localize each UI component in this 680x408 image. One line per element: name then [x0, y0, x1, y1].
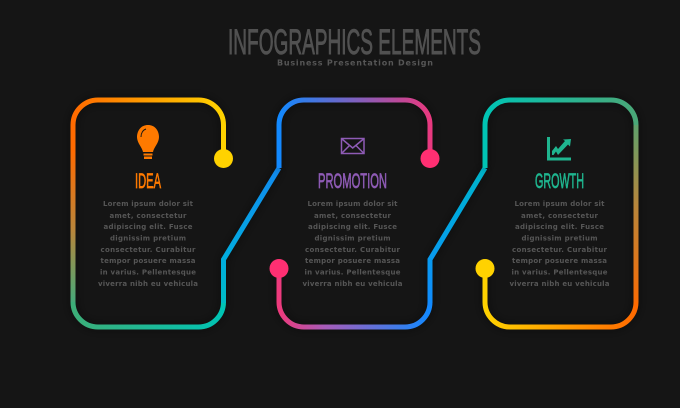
end dot [476, 259, 494, 278]
body text: growth: tempor posuere massa [512, 257, 607, 265]
heading: idea: IDEA [135, 170, 161, 193]
outline top [279, 100, 430, 168]
outline bottom [73, 302, 224, 327]
body text: growth: consectetur. Curabitur [512, 246, 608, 254]
body text: growth: in varius. Pellentesque [512, 268, 608, 276]
heading: growth: GROWTH [535, 170, 584, 193]
panel: growth [476, 100, 636, 327]
body text: growth: Lorem ipsum dolor sit [514, 200, 605, 208]
outline right [634, 125, 638, 302]
connector to growth [430, 168, 485, 303]
bottom dot [270, 259, 288, 278]
body text: promotion: adipiscing elit. Fusce [308, 223, 397, 231]
body text: idea: dignissim pretium [110, 234, 186, 242]
body text: promotion: viverra nibh eu vehicula [302, 280, 403, 288]
body text: idea: amet, consectetur [110, 212, 187, 220]
end dot [214, 149, 233, 168]
top dot [420, 149, 440, 168]
heading: promotion: PROMOTION [318, 170, 387, 193]
body text: promotion: amet, consectetur [314, 212, 392, 220]
body text: idea: tempor posuere massa [100, 257, 196, 265]
subtitle: Business Presentation Design [277, 58, 433, 68]
body text: growth: amet, consectetur [521, 212, 599, 220]
body text: growth [510, 200, 610, 288]
outline top [485, 100, 636, 168]
body text: growth: viverra nibh eu vehicula [510, 280, 610, 288]
body text: promotion: in varius. Pellentesque [304, 268, 401, 276]
title: INFOGRAPHICS ELEMENTS [228, 23, 481, 62]
body text: idea: consectetur. Curabitur [100, 246, 196, 254]
body text: growth: dignissim pretium [522, 234, 598, 242]
panel: promotion [270, 100, 485, 327]
body text: idea: Lorem ipsum dolor sit [103, 200, 194, 208]
outline bottom [279, 268, 430, 327]
body text: growth: adipiscing elit. Fusce [515, 223, 604, 231]
outline bottom [485, 268, 636, 327]
icon: light bulb [137, 125, 159, 159]
outline top [73, 100, 224, 170]
outline left [70, 150, 76, 302]
body text: idea [98, 200, 198, 288]
body text: idea: adipiscing elit. Fusce [104, 223, 193, 231]
body text: promotion: tempor posuere massa [305, 257, 400, 265]
body text: promotion: dignissim pretium [314, 234, 390, 242]
icon: growth chart [547, 137, 571, 160]
body text: idea: viverra nibh eu vehicula [98, 280, 198, 288]
connector to promotion [224, 168, 279, 303]
panel: idea [73, 100, 279, 327]
body text: idea: in varius. Pellentesque [100, 268, 196, 276]
icon: envelope [342, 138, 364, 154]
body text: promotion: Lorem ipsum dolor sit [308, 200, 398, 208]
body text: promotion: consectetur. Curabitur [305, 246, 401, 254]
body text: promotion [302, 200, 403, 288]
